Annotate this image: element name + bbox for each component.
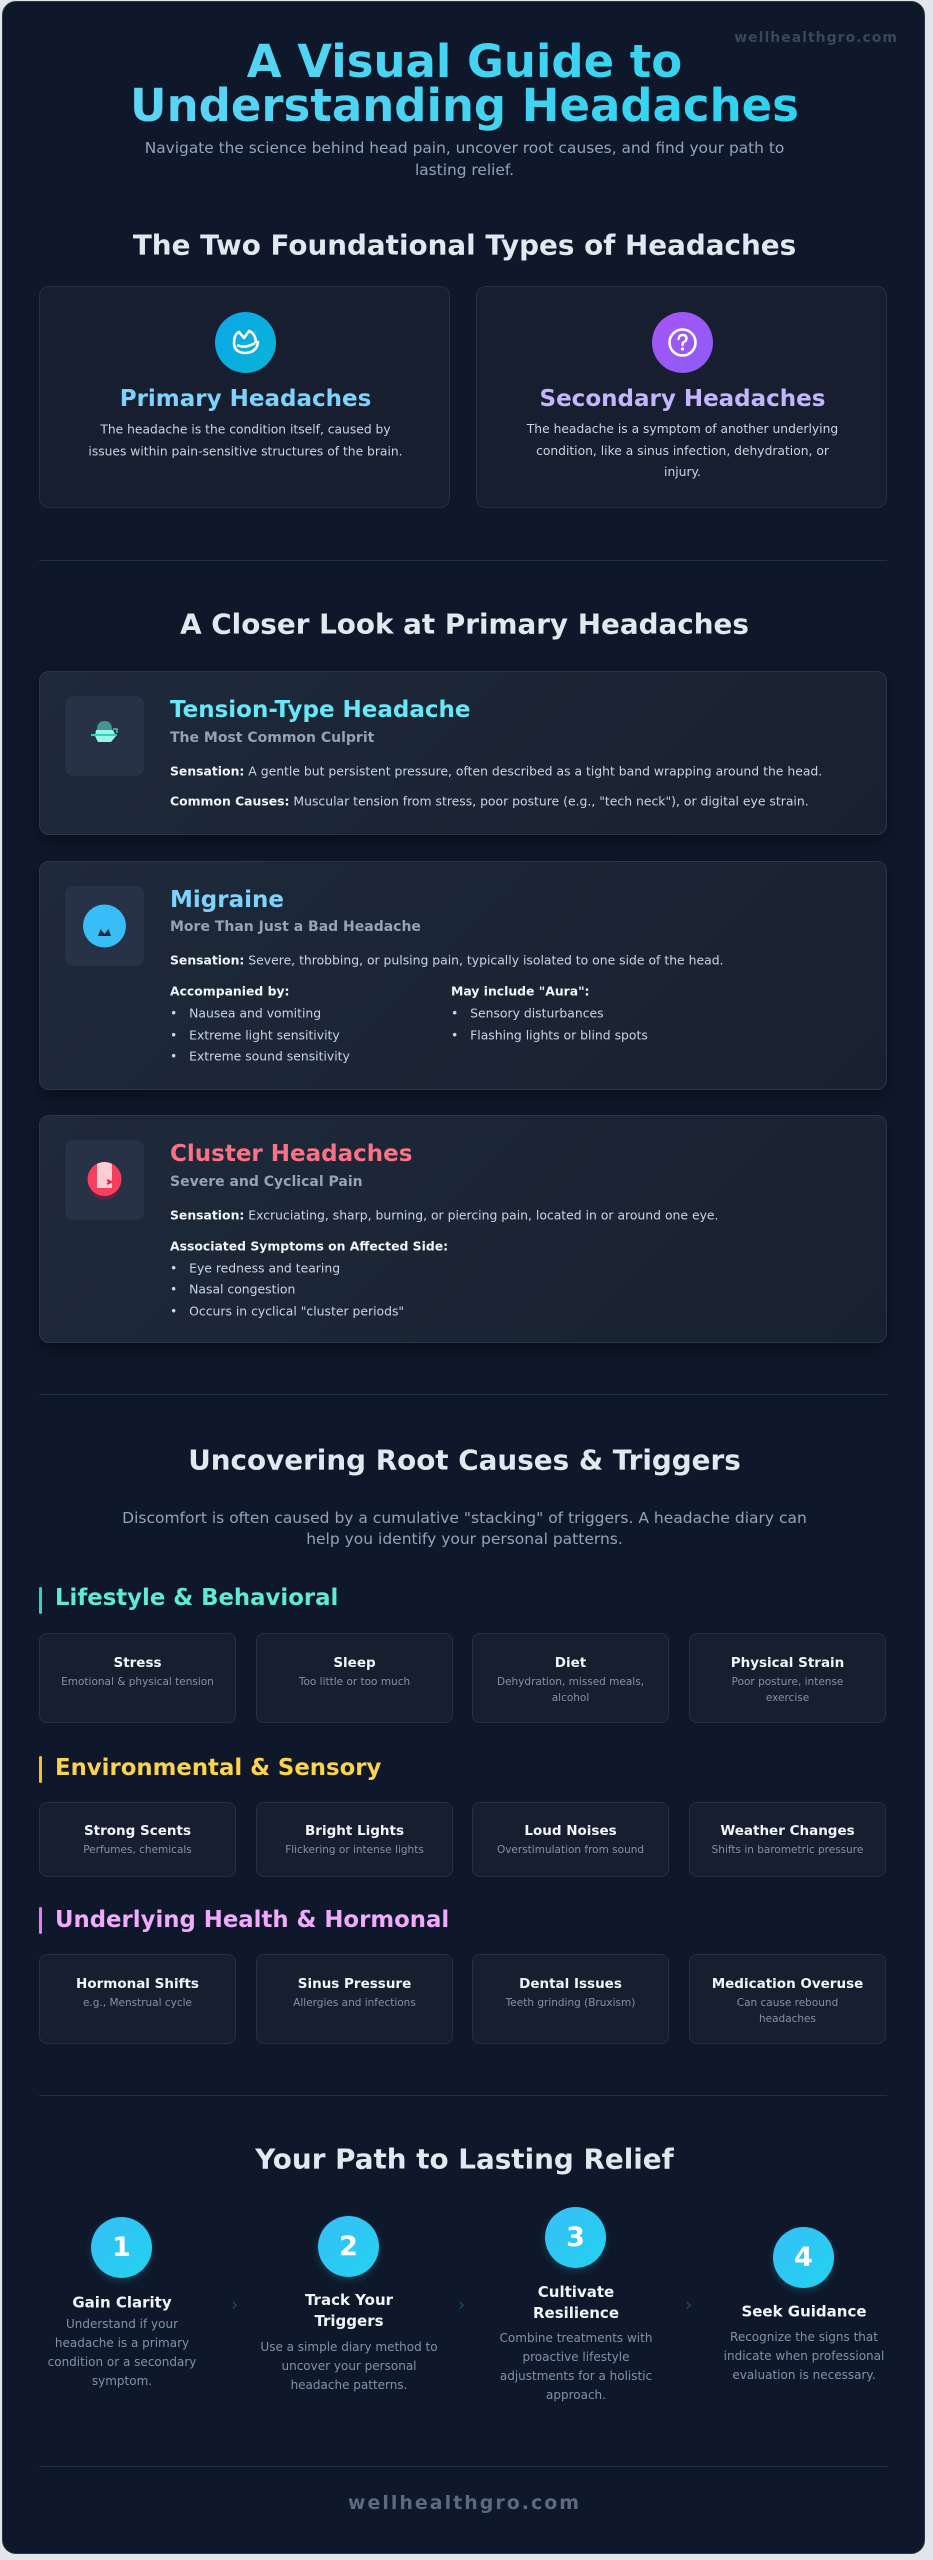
- box: stress: [39, 1633, 236, 1723]
- box: diet: Dehydration, missed meals, alcohol: [497, 1676, 644, 1704]
- secondary desc: The headache is a symptom of another underlying: [527, 422, 838, 436]
- list: accompanied by: • Extreme light sensitivity: [170, 1028, 340, 1042]
- title: Understanding Headaches: [130, 79, 799, 132]
- box: bright lights: Flickering or intense lights: [285, 1844, 424, 1856]
- migraine sensation: Sensation: Severe, throbbing, or pulsing pain, typically isolated to one side of the head.: [170, 952, 724, 968]
- cluster sensation: Sensation: Excruciating, sharp, burning, or piercing pain, located in or around one eye.: [170, 1208, 718, 1222]
- icon: cluster: [65, 1140, 144, 1220]
- subtitle: [145, 139, 784, 179]
- panel: cluster: [39, 1115, 887, 1343]
- box: diet: [472, 1633, 669, 1723]
- primary desc: The headache is the condition itself, caused by: [100, 422, 391, 436]
- box: sinus: Sinus Pressure: [298, 1976, 411, 1992]
- icon: question: [652, 312, 713, 373]
- box: strong scents: Perfumes, chemicals: [83, 1844, 192, 1856]
- box: medication: Can cause rebound headaches: [737, 1997, 838, 2025]
- box: dental: [472, 1954, 669, 2044]
- footer: wellhealthgro.com: [348, 2492, 581, 2514]
- list: accompanied by: [170, 984, 350, 1064]
- panel: secondary headaches: [476, 286, 887, 508]
- box: dental: Dental Issues: [519, 1976, 622, 1992]
- cluster subtitle: Severe and Cyclical Pain: [170, 1174, 363, 1190]
- list: aura: • Sensory disturbances: [451, 1006, 604, 1020]
- list: aura: [451, 984, 648, 1042]
- box: weather: [689, 1802, 886, 1877]
- arrow 3: ›: [685, 2294, 692, 2316]
- box: hormonal: Hormonal Shifts: [76, 1976, 199, 1992]
- step 3: 3: [566, 2222, 585, 2253]
- list: associated symptoms: Associated Symptoms on Affected Side:: [170, 1238, 448, 1254]
- heading: two types: The Two Foundational Types of Headaches: [133, 228, 796, 262]
- box: bright lights: Bright Lights: [305, 1823, 404, 1839]
- icon: migraine: [65, 886, 144, 966]
- primary desc: issues within pain-sensitive structures of the brain.: [88, 444, 403, 458]
- box: sleep: [256, 1633, 453, 1723]
- box: physical strain: Poor posture, intense exercise: [732, 1676, 843, 1704]
- category: environmental: Environmental & Sensory: [55, 1755, 381, 1781]
- box: weather: Weather Changes: [720, 1823, 855, 1839]
- tension sensation: Sensation: A gentle but persistent pressure, often described as a tight band wrapping around the head.: [170, 764, 822, 778]
- migraine subtitle: More Than Just a Bad Headache: [170, 919, 421, 935]
- step 1: Understand if your headache is a primary condition or a secondary symptom.: [48, 2317, 196, 2388]
- title: [130, 35, 799, 132]
- migraine title: Migraine: [170, 887, 284, 913]
- list: associated symptoms: • Eye redness and tearing: [170, 1260, 340, 1276]
- secondary desc: injury.: [664, 465, 701, 479]
- step 4: [724, 2227, 884, 2382]
- box: strong scents: [39, 1802, 236, 1877]
- panel: tension-type: [39, 671, 887, 835]
- step 2: Use a simple diary method to uncover your personal headache patterns.: [260, 2340, 438, 2392]
- panel: migraine: [39, 861, 887, 1090]
- step 3: [500, 2207, 652, 2402]
- list: associated symptoms: • Nasal congestion: [170, 1282, 295, 1296]
- step 3: Cultivate Resilience: [533, 2283, 619, 2322]
- list: associated symptoms: • Occurs in cyclical "cluster periods": [170, 1304, 404, 1318]
- tension title: Tension-Type Headache: [170, 697, 471, 723]
- list: accompanied by: • Nausea and vomiting: [170, 1006, 321, 1020]
- box: hormonal: e.g., Menstrual cycle: [83, 1997, 192, 2009]
- step 4: Seek Guidance: [741, 2302, 867, 2320]
- secondary desc: condition, like a sinus infection, dehydration, or: [536, 443, 829, 457]
- box: physical strain: [689, 1633, 886, 1723]
- list: aura: • Flashing lights or blind spots: [451, 1028, 648, 1042]
- secondary title: Secondary Headaches: [540, 386, 825, 412]
- list: accompanied by: • Extreme sound sensitivity: [170, 1048, 350, 1064]
- box: loud noises: [472, 1802, 669, 1877]
- step 1: Gain Clarity: [72, 2294, 172, 2312]
- box: bright lights: [256, 1802, 453, 1877]
- box: stress: Stress: [113, 1655, 162, 1671]
- intro paragraph: help you identify your personal patterns.: [306, 1530, 623, 1548]
- box: medication: [689, 1954, 886, 2044]
- step 4: Recognize the signs that indicate when professional evaluation is necessary.: [724, 2330, 884, 2382]
- primary desc: [88, 422, 403, 458]
- list: accompanied by: Accompanied by:: [170, 984, 290, 998]
- list: aura: May include "Aura":: [451, 984, 590, 998]
- intro paragraph: [122, 1509, 807, 1548]
- step 2: 2: [339, 2231, 358, 2262]
- icon: brain: [215, 312, 276, 373]
- box: loud noises: Overstimulation from sound: [497, 1844, 644, 1856]
- panel: primary headaches: [39, 286, 450, 508]
- subtitle: Navigate the science behind head pain, uncover root causes, and find your path to: [145, 139, 784, 157]
- heading: closer look: A Closer Look at Primary Headaches: [180, 608, 749, 640]
- subtitle: lasting relief.: [415, 161, 514, 179]
- heading: root causes: Uncovering Root Causes & Triggers: [188, 1444, 741, 1476]
- box: loud noises: Loud Noises: [524, 1823, 617, 1839]
- box: sleep: Sleep: [333, 1655, 376, 1671]
- box: sinus: [256, 1954, 453, 2044]
- watermark top: wellhealthgro.com: [734, 30, 898, 46]
- tension causes: Common Causes: Muscular tension from stress, poor posture (e.g., "tech neck"), or digital eye strain.: [170, 794, 809, 808]
- list: associated symptoms: [170, 1238, 448, 1318]
- step 4: 4: [794, 2242, 813, 2273]
- box: sinus: Allergies and infections: [293, 1997, 416, 2009]
- step 3: Combine treatments with proactive lifestyle adjustments for a holistic approach.: [500, 2331, 652, 2402]
- secondary desc: [526, 422, 838, 479]
- step 1: [48, 2217, 196, 2388]
- heading: path to relief: Your Path to Lasting Relief: [255, 2142, 674, 2176]
- box: diet: Diet: [555, 1655, 586, 1671]
- arrow 1: ›: [231, 2294, 238, 2316]
- box: physical strain: Physical Strain: [731, 1655, 844, 1671]
- arrow 2: ›: [458, 2294, 465, 2316]
- box: medication: Medication Overuse: [712, 1976, 863, 1992]
- step 1: 1: [112, 2232, 131, 2263]
- box: stress: Emotional & physical tension: [61, 1676, 214, 1688]
- box: dental: Teeth grinding (Bruxism): [506, 1997, 635, 2009]
- tension subtitle: The Most Common Culprit: [170, 730, 374, 746]
- step 2: [260, 2216, 438, 2392]
- box: strong scents: Strong Scents: [84, 1823, 191, 1839]
- title: A Visual Guide to: [247, 35, 682, 88]
- category: underlying health: Underlying Health & Hormonal: [55, 1907, 449, 1933]
- step 2: Track Your Triggers: [305, 2291, 393, 2330]
- intro paragraph: Discomfort is often caused by a cumulative "stacking" of triggers. A headache diary can: [122, 1509, 807, 1527]
- box: weather: Shifts in barometric pressure: [712, 1844, 863, 1856]
- box: hormonal: [39, 1954, 236, 2044]
- icon: tension: [65, 696, 144, 776]
- box: sleep: Too little or too much: [299, 1676, 410, 1688]
- cluster title: Cluster Headaches: [170, 1141, 412, 1167]
- category: lifestyle: Lifestyle & Behavioral: [55, 1585, 338, 1611]
- primary title: Primary Headaches: [120, 386, 371, 412]
